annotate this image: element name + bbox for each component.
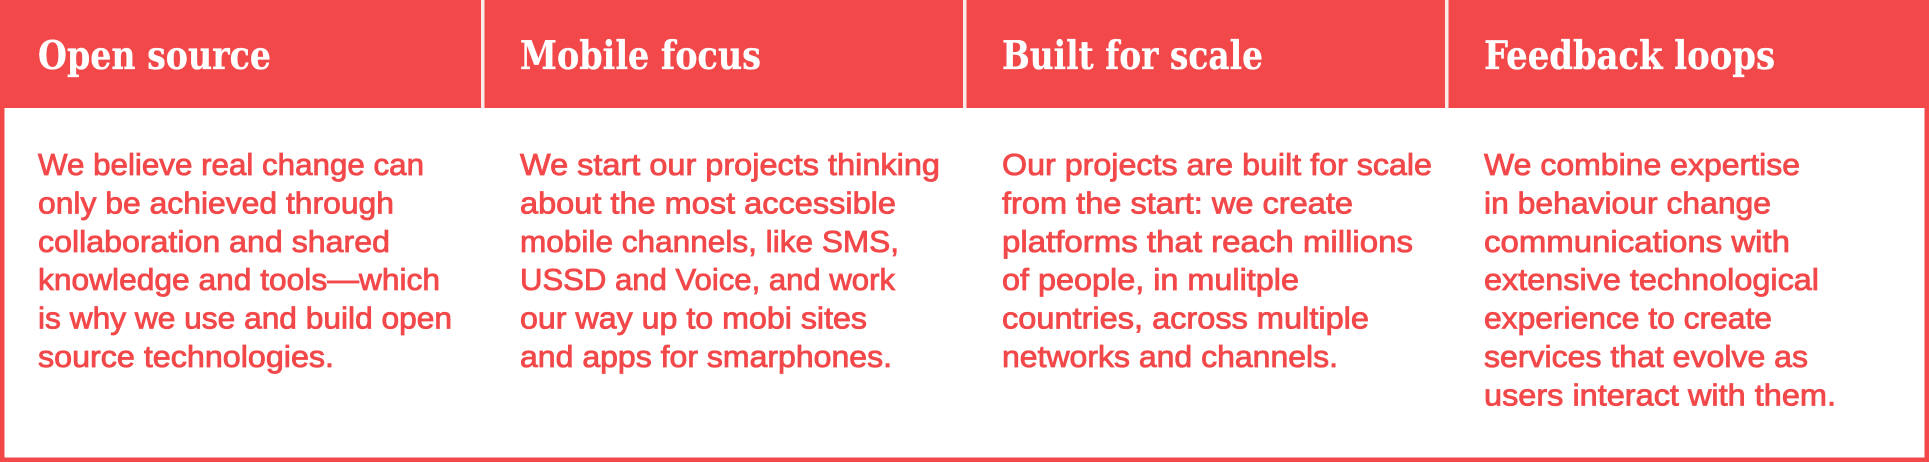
text block: feedback loops: users interact with them.: [1484, 377, 1836, 412]
panel: open source: [38, 33, 452, 374]
text block: feedback loops: extensive technological: [1484, 262, 1819, 297]
heading: feedback loops: Feedback loops: [1484, 33, 1775, 79]
panel: built for scale: [1002, 33, 1432, 374]
text block: built for scale: networks and channels.: [1002, 339, 1338, 374]
divider 3: [1445, 0, 1448, 108]
heading: built for scale: Built for scale: [1002, 33, 1263, 79]
text block: mobile focus: [520, 147, 940, 374]
text block: feedback loops: We combine expertise: [1484, 147, 1800, 182]
text block: open source: collaboration and shared: [38, 224, 390, 259]
heading: mobile focus: Mobile focus: [520, 33, 761, 79]
text block: open source: only be achieved through: [38, 185, 394, 220]
text block: open source: knowledge and tools—which: [38, 262, 440, 297]
text block: built for scale: [1002, 147, 1432, 374]
text block: open source: We believe real change can: [38, 147, 424, 182]
text block: open source: [38, 147, 452, 374]
text block: feedback loops: in behaviour change: [1484, 185, 1771, 220]
divider 1: [481, 0, 484, 108]
text block: mobile focus: our way up to mobi sites: [520, 301, 867, 336]
text block: feedback loops: [1484, 147, 1836, 412]
text block: mobile focus: We start our projects thinking: [520, 147, 940, 182]
text block: feedback loops: services that evolve as: [1484, 339, 1808, 374]
text block: built for scale: from the start: we create: [1002, 185, 1353, 220]
text block: open source: source technologies.: [38, 339, 334, 374]
text block: open source: is why we use and build open: [38, 301, 452, 336]
text block: mobile focus: USSD and Voice, and work: [520, 262, 895, 297]
text block: mobile focus: mobile channels, like SMS,: [520, 224, 899, 259]
text block: built for scale: of people, in mulitple: [1002, 262, 1299, 297]
text block: built for scale: platforms that reach millions: [1002, 224, 1413, 259]
text block: built for scale: Our projects are built for scale: [1002, 147, 1432, 182]
text block: feedback loops: communications with: [1484, 224, 1790, 259]
panel: feedback loops: [1484, 33, 1836, 412]
text block: mobile focus: and apps for smarphones.: [520, 339, 892, 374]
heading: open source: Open source: [38, 33, 271, 79]
text block: feedback loops: experience to create: [1484, 301, 1772, 336]
text block: built for scale: countries, across multiple: [1002, 301, 1369, 336]
divider 2: [963, 0, 966, 108]
panel: mobile focus: [520, 33, 940, 374]
text block: mobile focus: about the most accessible: [520, 185, 896, 220]
